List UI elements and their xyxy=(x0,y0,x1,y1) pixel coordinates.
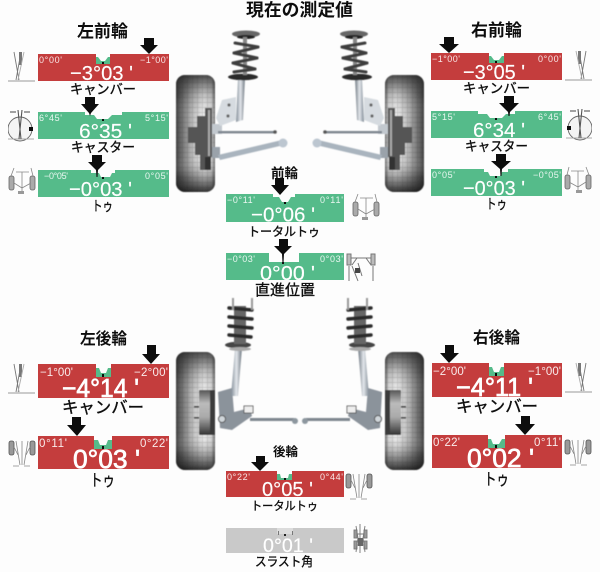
gauge: left rear toe xyxy=(38,436,169,474)
label: straight-ahead position: 直進位置 xyxy=(255,282,315,299)
arrow: left rear toe xyxy=(67,417,86,436)
gauge: right rear toe: 0°02 ' xyxy=(467,443,534,473)
label: left rear camber: キャンバー xyxy=(62,399,144,417)
arrow: left front caster xyxy=(81,97,99,116)
gauge: right rear toe: 0°11' xyxy=(534,437,561,449)
icon: left rear camber xyxy=(8,364,35,393)
gauge: right front camber: −3°05 ' xyxy=(463,61,525,84)
gauge: right front toe xyxy=(431,169,562,200)
gauge: left front caster: 6°45' xyxy=(39,113,62,123)
arrow: right rear camber xyxy=(440,345,459,363)
heading: rear axle: 後輪 xyxy=(273,444,298,459)
arrow: right front camber xyxy=(439,37,459,53)
gauge: right front camber: 0°00' xyxy=(538,54,561,64)
icon: right rear camber xyxy=(565,363,592,392)
gauge: front total toe: −0°06 ' xyxy=(251,204,315,226)
gauge: left rear camber: −4°14 ' xyxy=(62,373,139,403)
heading: front axle: 前輪 xyxy=(271,165,298,181)
arrow: left front toe xyxy=(88,155,106,177)
title: 現在の測定値 xyxy=(246,0,353,20)
gauge: left rear camber: −1°00' xyxy=(40,367,73,379)
gauge: right front caster: 6°34 ' xyxy=(473,119,525,142)
gauge: left front caster xyxy=(38,112,169,143)
gauge: front total toe: −0°11' xyxy=(227,195,255,205)
gauge: left rear toe: 0°03 ' xyxy=(73,444,140,474)
gauge: front total toe: 0°11' xyxy=(320,195,343,205)
icon: rear total toe xyxy=(346,474,372,499)
arrow: right rear toe xyxy=(515,416,535,435)
label: right front camber: キャンバー xyxy=(463,81,530,96)
gauge: left front toe: −0°05' xyxy=(44,171,68,181)
gauge: left front camber: −3°03 ' xyxy=(70,62,133,85)
gauge: front total toe xyxy=(226,194,344,226)
label: right rear toe: トゥ xyxy=(484,471,509,489)
gauge: rear total toe: 0°44' xyxy=(320,472,343,482)
arrow: right front toe xyxy=(491,154,511,176)
gauge: left front toe: −0°03 ' xyxy=(69,178,132,201)
icon: thrust angle car xyxy=(354,524,367,553)
gauge: thrust angle: 0°01 ' xyxy=(263,535,313,557)
label: left front toe: トゥ xyxy=(92,198,113,214)
gauge: right front toe: −0°03 ' xyxy=(463,177,525,200)
arrow: left rear camber xyxy=(142,345,160,364)
arrow: right front caster xyxy=(499,96,519,116)
label: left front caster: キャスター xyxy=(71,140,135,155)
gauge: right front toe: −0°05' xyxy=(533,170,561,180)
label: right front caster: キャスター xyxy=(465,139,528,154)
arrow: left front camber xyxy=(140,38,158,54)
gauge: left front camber xyxy=(38,54,169,85)
arrow: front total toe xyxy=(271,178,289,195)
label: right front toe: トゥ xyxy=(486,196,507,212)
gauge: left rear toe: 0°22' xyxy=(140,438,168,450)
gauge: left front toe xyxy=(38,170,169,201)
label: left front camber: キャンバー xyxy=(70,82,136,97)
gauge: right rear toe: 0°22' xyxy=(433,437,460,449)
icon: right rear toe xyxy=(565,440,591,465)
arrow: straight-ahead position xyxy=(274,239,292,263)
label: front total toe: トータルトゥ xyxy=(248,225,320,239)
icon: left caster xyxy=(8,110,34,141)
gauge: right front caster: 5°15' xyxy=(432,112,455,122)
heading: left rear wheel: 左後輪 xyxy=(80,329,127,348)
gauge: right front camber xyxy=(431,53,562,84)
gauge: left rear camber: −2°00' xyxy=(134,367,168,379)
label: rear total toe: トータルトゥ xyxy=(251,499,318,513)
icon: right caster xyxy=(566,109,592,140)
icon: right camber xyxy=(565,51,592,80)
illustration: right front suspension xyxy=(312,30,424,192)
gauge: straight-ahead position: −0°03' xyxy=(227,254,255,264)
icon: right front toe xyxy=(565,167,591,193)
gauge: rear total toe xyxy=(226,471,344,501)
icon: left rear toe xyxy=(9,441,35,466)
icon: straight-ahead position xyxy=(347,254,375,281)
gauge: left front camber: 0°00' xyxy=(39,55,62,65)
illustration: left front suspension xyxy=(176,30,288,192)
heading: left front wheel: 左前輪 xyxy=(77,22,128,41)
gauge: right rear camber: −4°11 ' xyxy=(456,372,533,402)
gauge: left front toe: 0°05' xyxy=(145,171,168,181)
gauge: straight-ahead position: 0°00 ' xyxy=(260,262,315,285)
icon: front total toe xyxy=(353,194,379,220)
illustration: right rear suspension xyxy=(302,298,424,470)
gauge: straight-ahead position xyxy=(226,253,344,285)
gauge: right front caster xyxy=(431,111,562,142)
gauge: left rear toe: 0°11' xyxy=(39,438,67,450)
gauge: right front toe: 0°05' xyxy=(432,170,455,180)
gauge: left front camber: −1°00' xyxy=(140,55,168,65)
gauge: thrust angle xyxy=(226,528,344,557)
heading: right rear wheel: 右後輪 xyxy=(473,328,520,347)
gauge: left front caster: 5°15' xyxy=(145,113,168,123)
label: right rear camber: キャンバー xyxy=(456,398,538,416)
gauge: left rear camber xyxy=(38,364,169,403)
arrow: rear total toe xyxy=(251,456,269,471)
icon: left camber xyxy=(8,52,35,81)
gauge: rear total toe: 0°05 ' xyxy=(262,479,313,501)
gauge: rear total toe: 0°22' xyxy=(227,472,250,482)
heading: right front wheel: 右前輪 xyxy=(471,21,522,40)
gauge: right front camber: −1°00' xyxy=(432,54,460,64)
gauge: right rear toe xyxy=(432,435,562,473)
icon: left front toe xyxy=(9,168,35,194)
gauge: right rear camber xyxy=(432,363,562,402)
gauge: left front caster: 6°35 ' xyxy=(79,120,132,143)
gauge: straight-ahead position: 0°03' xyxy=(320,254,343,264)
label: thrust angle: スラスト角 xyxy=(255,555,313,569)
gauge: right rear camber: −2°00' xyxy=(433,366,466,378)
label: left rear toe: トゥ xyxy=(90,472,115,490)
illustration: left rear suspension xyxy=(176,298,298,470)
gauge: right rear camber: −1°00' xyxy=(528,366,561,378)
gauge: right front caster: 6°45' xyxy=(538,112,561,122)
